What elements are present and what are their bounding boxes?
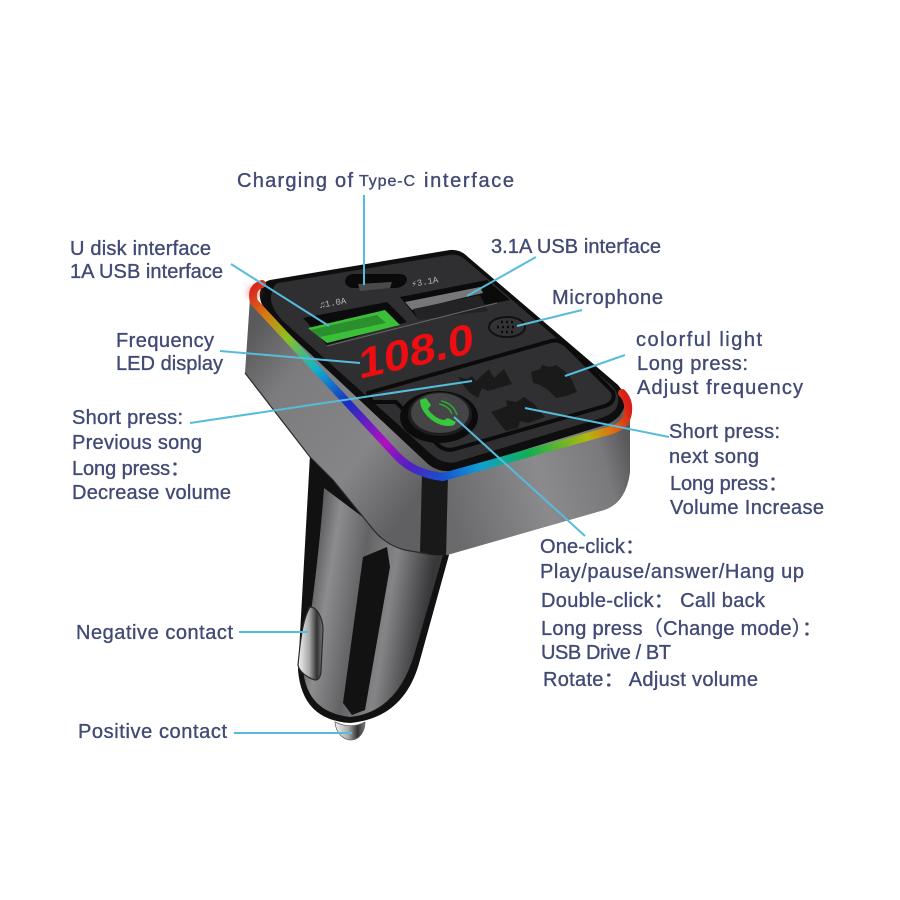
label: one-click: Rotate： Adjust volume (543, 669, 758, 691)
label: previous song: Short press: (72, 407, 183, 429)
positive contact tip (335, 722, 365, 740)
label: negative contact: Negative contact (76, 622, 233, 644)
phone icon (420, 398, 456, 426)
microphone (489, 317, 525, 337)
label: one-click: Long press（Change mode）： (541, 617, 822, 640)
label: colorful light: colorful light (636, 329, 762, 351)
label: Type-C: Type-C (359, 173, 415, 190)
1A USB port green (303, 302, 407, 345)
port labels: ♫1.0A (319, 296, 348, 311)
top face (260, 250, 625, 471)
label: frequency (116, 330, 223, 375)
port labels: ⚡3.1A (411, 275, 440, 290)
label: colorful light: Long press: (637, 353, 748, 375)
label: one-click: Double-click： Call back (541, 590, 766, 612)
label: one-click: One-click： (540, 536, 645, 558)
next button (491, 397, 545, 431)
label: next song: Long press： (670, 473, 788, 495)
label: positive contact: Positive contact (78, 721, 227, 743)
label: previous song (72, 407, 231, 504)
label: Type-C (237, 170, 514, 192)
rainbow light ring (247, 284, 628, 477)
label: next song: Volume Increase (670, 497, 824, 519)
label: frequency: LED display (116, 353, 223, 375)
label: previous song: Decrease volume (72, 482, 231, 504)
callout lines (190, 195, 669, 733)
button panel (368, 341, 614, 450)
3.1A USB port (400, 280, 510, 320)
car charger device (245, 250, 630, 740)
panel divider (327, 303, 497, 346)
label: U disk (70, 238, 223, 283)
label: one-click: Play/pause/answer/Hang up (540, 561, 804, 583)
charger plug body (298, 455, 449, 723)
label: one-click: USB Drive / BT (541, 642, 671, 664)
label: 3.1A USB: 3.1A USB interface (491, 236, 661, 258)
label: next song: next song (669, 446, 759, 468)
usb-c port (345, 274, 407, 291)
label: one-click (540, 536, 822, 691)
label: previous song: Long press： (72, 458, 190, 480)
label: U disk: 1A USB interface (70, 261, 223, 283)
LED display: 108.0 (358, 314, 474, 388)
label: colorful light: Adjust frequency (637, 377, 803, 399)
call button (400, 391, 478, 443)
label: previous song: Previous song (72, 432, 202, 454)
previous button (458, 369, 512, 398)
housing sides (245, 298, 630, 555)
label: colorful light (636, 329, 803, 399)
colorful light button (531, 365, 577, 398)
label: microphone: Microphone (552, 287, 663, 309)
negative contact (298, 607, 323, 680)
label: next song: Short press: (669, 421, 780, 443)
label: frequency: Frequency (116, 330, 214, 352)
label: Type-C: interface (424, 170, 514, 192)
label: U disk: U disk interface (70, 238, 211, 260)
port labels (319, 275, 440, 311)
label: next song (669, 421, 824, 519)
label: Type-C: Charging of (237, 170, 353, 192)
